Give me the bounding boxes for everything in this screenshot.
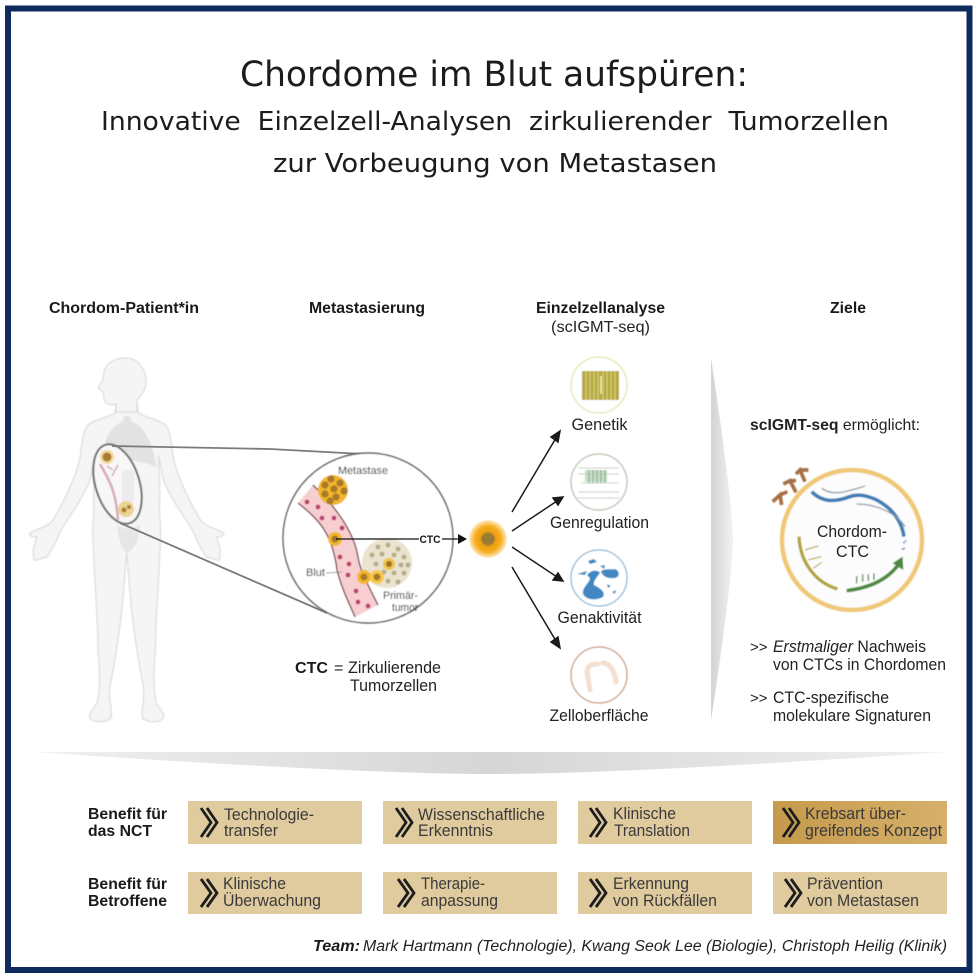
row label: Benefit für Betroffene [88,876,167,910]
benefit box: Krebsart übergreifendes Konzept: Krebsart über- [805,805,906,823]
row label: Benefit für das NCT [88,806,167,840]
arrows to analyses [512,431,563,648]
benefit box: Klinische Überwachung: Klinische [223,875,286,893]
row label: Benefit für das NCT: das NCT [88,823,152,840]
benefit box: Klinische Überwachung [188,872,362,914]
benefit box: Therapieanpassung: anpassung [421,892,498,910]
CTC definition: Zirkulierende [348,659,441,677]
magnified circle: metastasis process [283,453,453,623]
row label: Benefit für Betroffene: Benefit für [88,876,167,893]
isolated CTC cell [469,520,507,558]
goal: CTC signatures: >> [750,690,768,707]
olive strand [799,537,837,589]
label: Zelloberfläche: Zelloberfläche [550,707,648,725]
goal: CTC signatures: CTC-spezifische [773,689,889,707]
team credits: Team: [313,938,360,955]
column heading: Metastasierung: Metastasierung [309,300,425,317]
benefit box: Klinische Translation [578,801,752,844]
benefit box: Erkennung von Rückfällen: von Rückfällen [613,892,717,910]
label: Primärtumor: tumor [392,602,418,614]
benefit box: Erkennung von Rückfällen: Erkennung [613,875,689,893]
column heading: Ziele: Ziele [830,300,866,317]
benefit box: Wissenschaftliche Erkenntnis: Wissenschaftliche [418,806,545,824]
label: Primärtumor: Primär- [383,590,418,602]
goal: first detection: >> [750,639,768,656]
benefit box: Wissenschaftliche Erkenntnis [383,801,557,844]
title: Chordome im Blut aufspüren: [240,55,748,95]
grey horizontal arrow [35,752,945,774]
title: zur Vorbeugung von Metastasen [273,149,717,179]
title [101,55,889,179]
row label: Benefit für das NCT: Benefit für [88,806,167,823]
benefit box: Krebsart übergreifendes Konzept [773,801,947,844]
label: Chordom-CTC: CTC [836,543,869,561]
column heading: Einzelzellanalyse: Einzelzellanalyse [536,300,665,317]
goal: first detection: Erstmaliger Nachweis [773,638,926,656]
team credits: Mark Hartmann (Technologie), Kwang Seok Lee (Biologie), Christoph Heilig (Klinik) [363,938,947,955]
benefit box: Klinische Translation: Klinische [613,805,676,823]
benefit box: Klinische Überwachung: Überwachung [223,892,321,910]
title: Innovative Einzelzell-Analysen zirkulierender Tumorzellen [101,107,889,137]
CTC definition: Tumorzellen [350,677,437,695]
benefit box: Technologietransfer: Technologie- [224,806,314,824]
label: Chordom-CTC: Chordom- [817,523,887,541]
icon: Genregulation [571,454,627,510]
benefit box: Krebsart übergreifendes Konzept: greifendes Konzept [805,822,942,840]
benefit box: Therapieanpassung [383,872,557,914]
label: Metastase: Metastase [338,465,388,477]
metastasis cluster [318,475,348,505]
benefit box: Erkennung von Rückfällen [578,872,752,914]
CTC definition: = [334,660,343,677]
label: Primärtumor [383,590,418,614]
benefit box: Prävention von Metastasen: von Metastasen [807,892,919,910]
label: Genetik: Genetik [572,416,628,434]
antibodies [773,470,808,505]
circulating tumor cell [328,532,342,546]
benefit box: Therapieanpassung: Therapie- [421,875,485,893]
benefit box: Technologietransfer: transfer [224,822,278,840]
column heading: Einzelzellanalyse: (scIGMT-seq) [551,319,650,336]
green arrow [847,563,899,591]
label: Genaktivität: Genaktivität [558,609,642,627]
benefit box: Wissenschaftliche Erkenntnis: Erkenntnis [418,822,493,840]
label: Chordom-CTC [817,523,887,561]
label: Blut: Blut [306,567,325,579]
CTC definition: CTC [295,660,328,677]
goal: CTC signatures [750,689,931,725]
row label: Benefit für Betroffene: Betroffene [88,893,167,910]
arrow: CTC to single cell: CTC [420,534,441,546]
goal: first detection [750,638,946,674]
primary tumor [357,538,412,588]
column heading: Chordom-Patient*in: Chordom-Patient*in [49,300,199,317]
goals intro text: scIGMT-seq ermöglicht: [750,417,920,434]
zoom connector lines [112,446,363,613]
arrow: CTC to single cell [336,534,467,546]
label: Blut [306,567,342,579]
benefit box: Prävention von Metastasen [773,872,947,914]
icon: Genaktivität [571,550,627,606]
grey arrow toward goals [711,358,733,720]
icon: Zelloberfläche [571,647,627,703]
goal: first detection: von CTCs in Chordomen [773,656,946,674]
benefit box: Technologietransfer [188,801,362,844]
benefit box: Klinische Translation: Translation [614,822,690,840]
blood vessel [298,485,378,617]
benefit box: Prävention von Metastasen: Prävention [807,875,883,893]
label: Genregulation: Genregulation [550,514,649,532]
blue RNA strand [812,492,904,537]
icon: Genetik [571,357,627,413]
goal: CTC signatures: molekulare Signaturen [773,707,931,725]
human body illustration [30,358,224,722]
CTC definition [295,659,441,695]
Chordom-CTC diagram [773,470,922,610]
column heading: Einzelzellanalyse [536,300,665,336]
